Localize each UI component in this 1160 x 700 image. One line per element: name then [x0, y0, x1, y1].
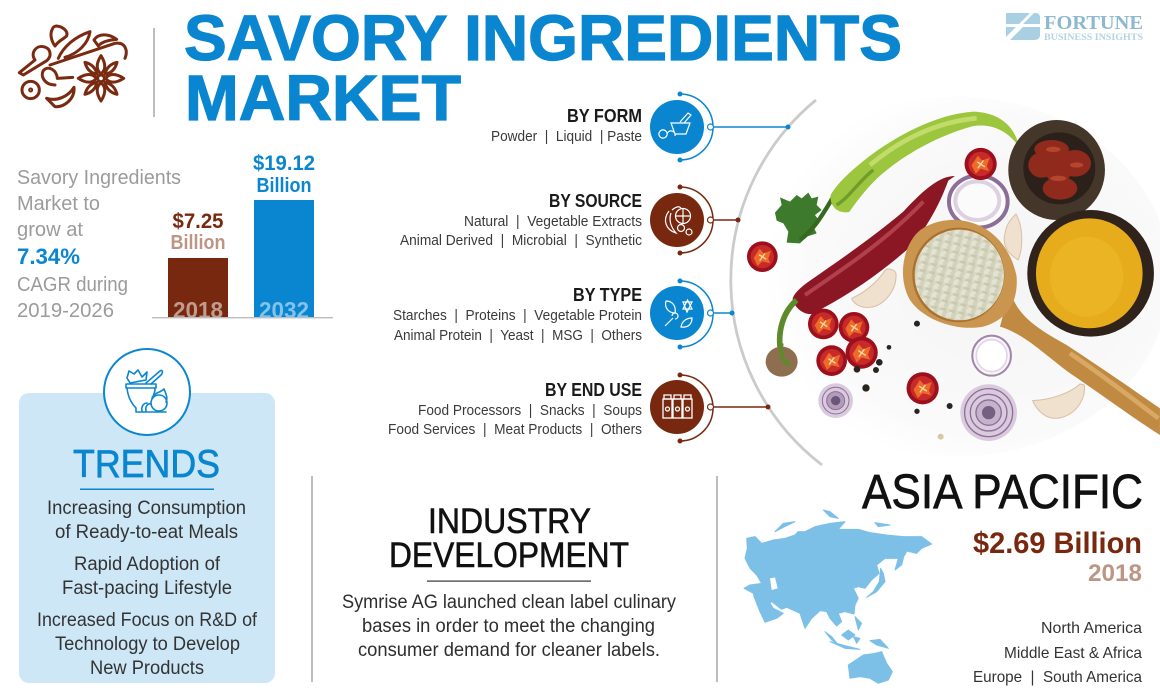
- segment: by end use: Food Services | Meat Products | Others: [388, 421, 642, 438]
- chili slices: [747, 148, 997, 404]
- trend items: Fast-pacing Lifestyle: [62, 578, 232, 599]
- body text: Symrise AG launched clean label culinary: [342, 592, 676, 613]
- panel: industry development: [342, 502, 676, 661]
- text: CAGR statement: [17, 167, 181, 322]
- logo: Fortune Business Insights: [1006, 12, 1143, 43]
- garlic: [852, 214, 1085, 418]
- red chili: [780, 176, 955, 362]
- segment: by type: Animal Protein | Yeast | MSG | Others: [394, 327, 642, 344]
- segment: by source: Natural | Vegetable Extracts: [464, 213, 642, 230]
- panel: Asia Pacific stats: [862, 466, 1143, 686]
- trend items: Rapid Adoption of: [74, 554, 221, 575]
- title: MARKET: [185, 62, 461, 134]
- dark bowl with goji: [1008, 120, 1105, 220]
- segment: by type: [393, 278, 734, 350]
- other regions: Europe | South America: [973, 669, 1142, 686]
- bar 2018: $7.25: [172, 210, 224, 233]
- heading: DEVELOPMENT: [389, 536, 629, 575]
- green chili: [831, 112, 1019, 212]
- segment: by type: BY TYPE: [573, 285, 642, 305]
- bar chart: market size: [152, 152, 333, 323]
- text: CAGR statement: grow at: [17, 219, 83, 241]
- icon: mortar and pestle: [104, 349, 190, 435]
- title: [184, 2, 902, 134]
- bar 2032: $19.12: [253, 152, 315, 175]
- segment: by type: Starches | Proteins | Vegetable Protein: [393, 307, 642, 324]
- other regions: Middle East & Africa: [1004, 645, 1142, 662]
- heading: [389, 502, 629, 575]
- panel: Asia Pacific stats: 2018: [1088, 560, 1142, 587]
- trend items: Increasing Consumption: [47, 498, 246, 519]
- nutmeg: [766, 343, 798, 377]
- text: CAGR statement: 2019-2026: [17, 300, 114, 322]
- heading: INDUSTRY: [428, 502, 591, 541]
- wooden spoon: [903, 220, 1160, 435]
- onion rings lower: [818, 336, 1017, 441]
- icon: by end use: [650, 372, 770, 444]
- arc: [731, 100, 822, 465]
- bar 2032: Billion: [256, 175, 312, 197]
- logo: Fortune Business Insights: FORTUNE: [1044, 12, 1143, 34]
- trend items: of Ready-to-eat Meals: [55, 522, 238, 543]
- panel: trends: TRENDS: [73, 443, 220, 486]
- text: CAGR statement: Savory Ingredients: [17, 167, 181, 189]
- segment: by source: Animal Derived | Microbial | Synthetic: [400, 232, 642, 249]
- icon: spices: [19, 26, 126, 107]
- bar 2032: 2032: [259, 297, 309, 323]
- image: spices and vegetables: [743, 97, 1160, 457]
- peppercorns: [854, 321, 953, 414]
- segment: by form: BY FORM: [567, 106, 642, 126]
- body text: bases in order to meet the changing: [362, 616, 655, 637]
- body text: consumer demand for cleaner labels.: [358, 640, 660, 661]
- segment: by source: [400, 184, 740, 256]
- onion ring upper: [949, 176, 1008, 228]
- turmeric bowl: [1027, 210, 1154, 337]
- icon: by type: [650, 278, 734, 350]
- segment: by form: [491, 92, 790, 162]
- text: CAGR statement: Market to: [17, 193, 100, 215]
- segment: by form: Powder | Liquid | Paste: [491, 128, 642, 145]
- trend items: New Products: [90, 658, 204, 679]
- icon: by source: [650, 184, 740, 256]
- bar 2018: 2018: [173, 297, 223, 323]
- icon: by form: [650, 92, 790, 162]
- trend items: Increased Focus on R&D of: [37, 610, 258, 631]
- map: Asia Pacific: [744, 510, 932, 683]
- cilantro: [775, 193, 833, 243]
- panel: Asia Pacific stats: $2.69 Billion: [973, 527, 1142, 560]
- panel: trends: [19, 349, 275, 683]
- bar 2018: Billion: [170, 232, 226, 254]
- trend items: Technology to Develop: [55, 634, 240, 655]
- trend items: [37, 498, 258, 679]
- bar 2018: [168, 210, 228, 323]
- other regions: North America: [1041, 620, 1142, 637]
- segment: by end use: [388, 372, 770, 444]
- segment: by source: BY SOURCE: [549, 191, 642, 211]
- bar 2032: [253, 152, 315, 323]
- text: CAGR statement: CAGR during: [17, 274, 128, 296]
- logo: Fortune Business Insights: BUSINESS INSIGHTS: [1044, 33, 1143, 43]
- text: CAGR statement: 7.34%: [17, 244, 80, 269]
- segment: by end use: BY END USE: [545, 380, 642, 400]
- body text: [342, 592, 676, 661]
- other regions: [973, 620, 1142, 686]
- panel: Asia Pacific stats: ASIA PACIFIC: [862, 466, 1143, 519]
- segment: by end use: Food Processors | Snacks | Soups: [418, 402, 642, 419]
- title: SAVORY INGREDIENTS: [184, 2, 902, 74]
